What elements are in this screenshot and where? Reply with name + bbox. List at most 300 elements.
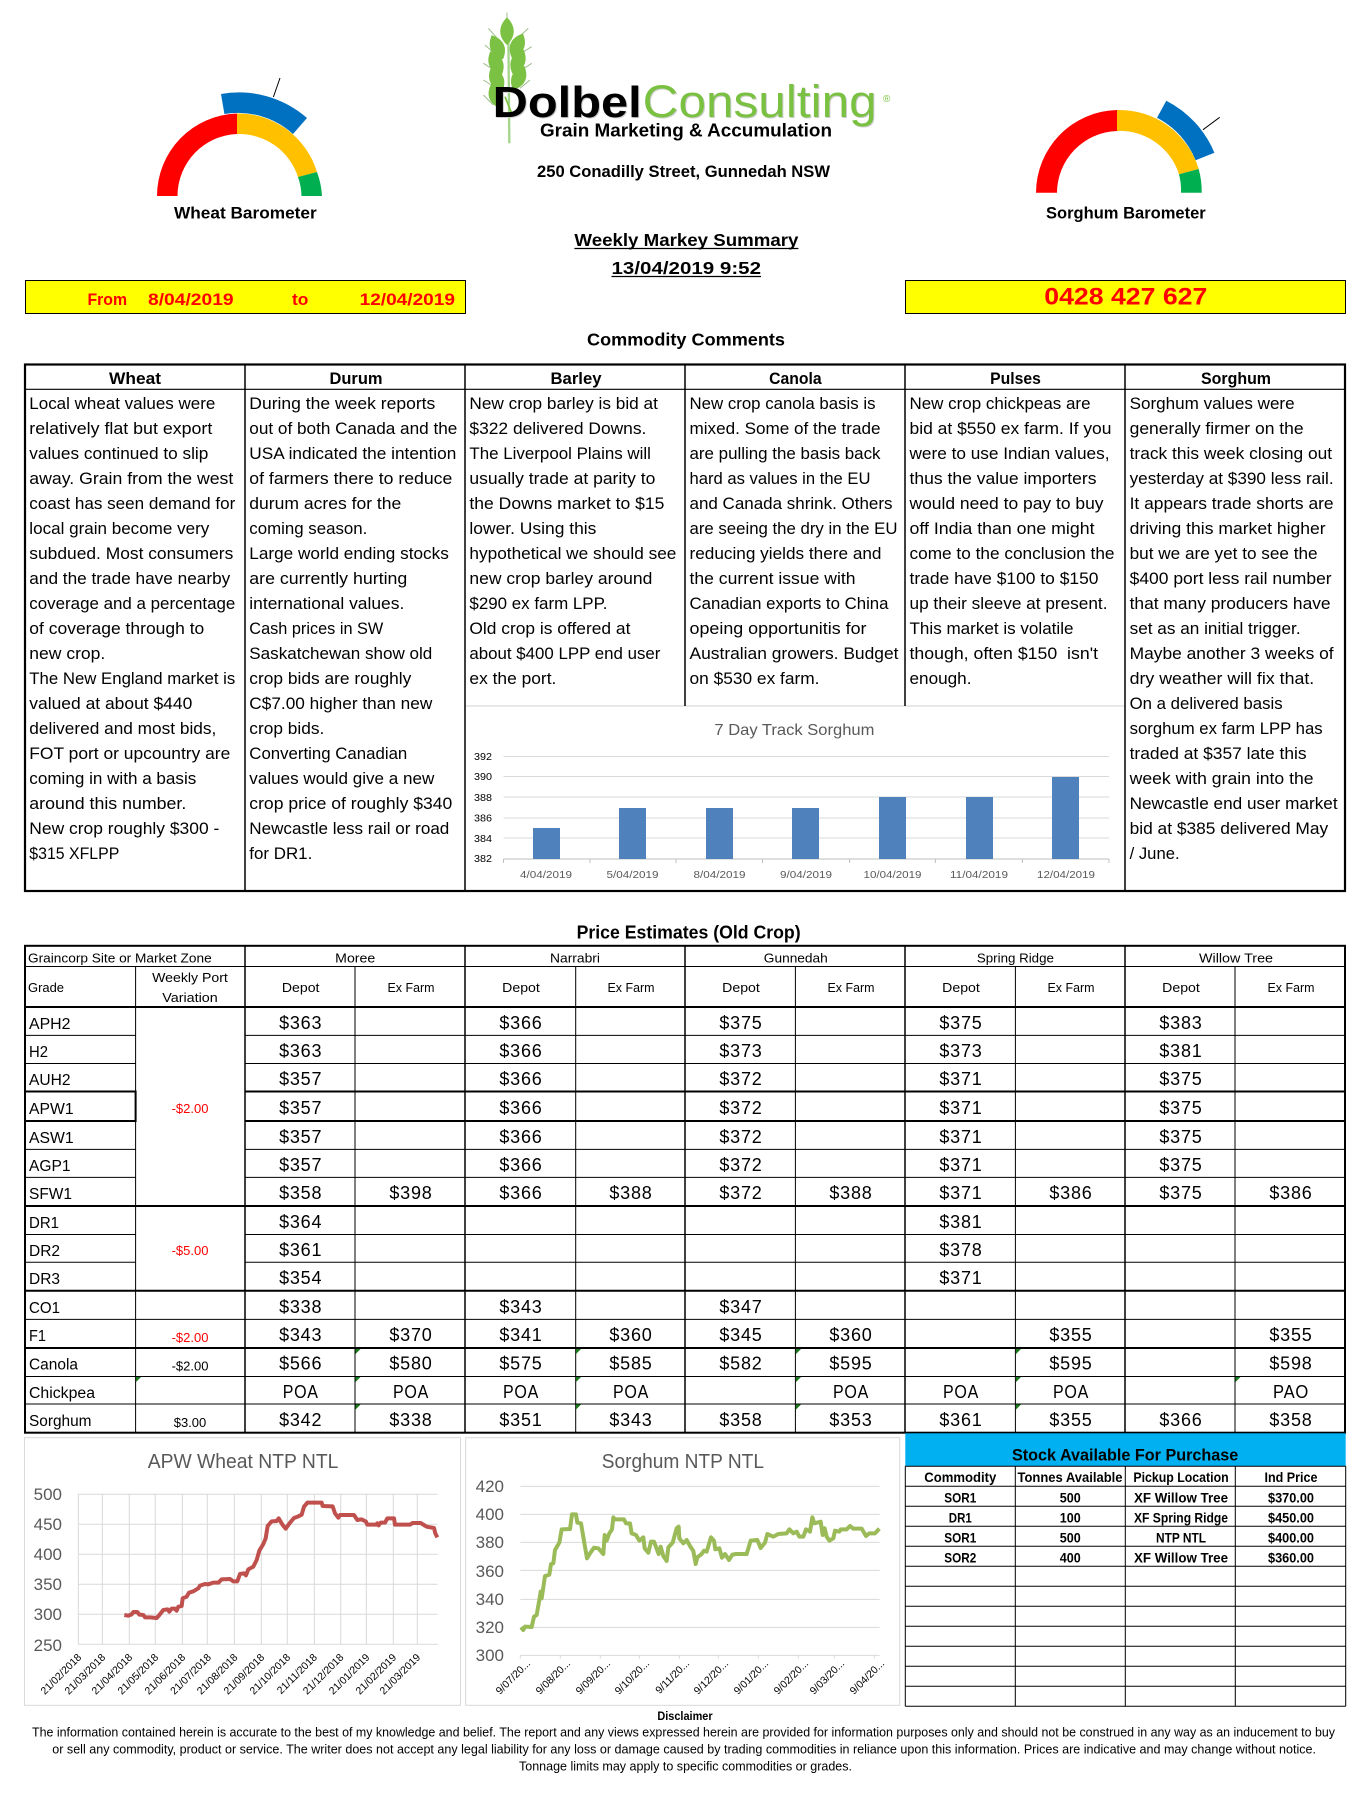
- chart: 7 day track sorghum: 392: [474, 751, 492, 763]
- stock row: SOR2 Willow Tree: $360.00: [1268, 1549, 1314, 1565]
- header: site row: Moree: [335, 950, 375, 965]
- wheat comment: around this number.: [29, 795, 186, 813]
- row: CO1: $343: [499, 1297, 543, 1317]
- chart: APW wheat NTP NTL: 500: [34, 1485, 62, 1504]
- wheat comment: coming in with a basis: [29, 770, 196, 788]
- stock table header row: [924, 1469, 1318, 1485]
- chart: APW wheat NTP NTL: 21/06/2018: [142, 1652, 188, 1697]
- pulses comment: up their sleeve at present.: [910, 595, 1108, 613]
- wheat comment: relatively flat but export: [29, 420, 213, 438]
- stock row: SOR1 NTP NTL: $400.00: [1268, 1529, 1314, 1545]
- stock table header row: Commodity: [924, 1469, 996, 1485]
- row: APH2: APH2: [29, 1016, 70, 1033]
- row: Chickpea: POA: [833, 1382, 869, 1402]
- chart: APW wheat NTP NTL: 21/07/2018: [168, 1652, 214, 1697]
- row: Chickpea: POA: [393, 1382, 429, 1402]
- row: CO1: [29, 1297, 763, 1317]
- pulses comment: come to the conclusion the: [910, 545, 1114, 563]
- wheat comment: [29, 395, 236, 863]
- sorghum comment: sorghum ex farm LPP has: [1130, 720, 1323, 738]
- stock row: DR1 Spring Ridge: [949, 1509, 1314, 1525]
- report title: Weekly Markey Summary: [574, 230, 799, 250]
- row: Sorghum: $3.00: [174, 1415, 206, 1430]
- chart: APW wheat NTP NTL: 21/11/2018: [275, 1652, 320, 1697]
- row: Chickpea: Chickpea: [29, 1385, 95, 1402]
- panel: price estimates table: [25, 946, 1345, 1433]
- sorghum comment: but we are yet to see the: [1130, 545, 1318, 563]
- pulses comment: New crop chickpeas are: [910, 395, 1090, 413]
- canola comment: reducing yields there and: [690, 545, 882, 563]
- row: H2: $363: [279, 1041, 322, 1061]
- chart: 7 day track sorghum: 11/04/2019: [950, 869, 1008, 881]
- chart: sorghum NTP NTL: 340: [476, 1590, 504, 1609]
- wheat comment: coverage and a percentage: [29, 595, 235, 613]
- barley comment: New crop barley is bid at: [469, 395, 658, 413]
- durum comment: During the week reports: [249, 395, 435, 413]
- chart: APW wheat NTP NTL: 21/04/2018: [89, 1652, 135, 1697]
- row: DR1: DR1: [29, 1215, 59, 1232]
- chart: APW wheat NTP NTL: 21/12/2018: [301, 1652, 347, 1697]
- pulses comment: off India than one might: [910, 520, 1095, 538]
- row: F1: $355: [1049, 1325, 1093, 1345]
- green comment markers: [136, 1349, 1240, 1410]
- sorghum comment: Sorghum values were: [1130, 395, 1295, 413]
- row: APW1: [29, 1098, 1203, 1118]
- row: DR3: DR3: [29, 1271, 60, 1288]
- wheat comment: New crop roughly $300 -: [29, 820, 219, 838]
- chart: APW wheat NTP NTL: 21/05/2018: [115, 1652, 161, 1697]
- chart: APW wheat NTP NTL: 21/03/2018: [62, 1652, 108, 1697]
- header: grade row: Ex Farm: [608, 980, 654, 995]
- row: H2: [29, 1041, 1203, 1061]
- phone number box: 0428 427 627: [1044, 283, 1207, 310]
- logo: Dolbel Consulting: Dolbel: [493, 78, 642, 127]
- row: ASW1: $372: [719, 1127, 763, 1147]
- canola comment: opeing opportunitis for: [690, 620, 867, 638]
- header: grade row: [28, 970, 1314, 1005]
- date range box: to: [292, 291, 308, 309]
- date range box: From: [88, 291, 127, 309]
- row: Canola: $580: [389, 1354, 433, 1374]
- row: H2: $381: [1159, 1041, 1203, 1061]
- column headers: [109, 370, 1271, 388]
- durum comment: of farmers there to reduce: [249, 470, 452, 488]
- stock table title: [905, 1433, 1346, 1466]
- chart: sorghum NTP NTL: 9/12/20...: [692, 1658, 731, 1697]
- wheat comment: $315 XFLPP: [29, 845, 119, 863]
- pulses comment: trade have $100 to $150: [910, 570, 1098, 588]
- row: AGP1: $366: [499, 1155, 543, 1175]
- chart: 7 day track sorghum: 10/04/2019: [864, 869, 922, 881]
- stock row: SOR1 NTP NTL: 500: [1060, 1529, 1081, 1545]
- row: Chickpea: [29, 1382, 1309, 1402]
- row: SFW1: $372: [719, 1183, 763, 1203]
- row: APW1: $357: [279, 1098, 322, 1118]
- row: Canola: $582: [719, 1354, 763, 1374]
- sorghum comment: / June.: [1130, 845, 1180, 863]
- chart: sorghum NTP NTL: 9/10/20...: [613, 1658, 652, 1697]
- wheat comment: away. Grain from the west: [29, 470, 234, 488]
- panel: stock available for purchase: [905, 1433, 1346, 1706]
- header: grade row: Grade: [28, 980, 64, 995]
- row: DR2: -$5.00: [172, 1243, 208, 1258]
- row: Sorghum: Sorghum: [29, 1413, 92, 1430]
- stock table header row: Ind Price: [1264, 1469, 1318, 1485]
- chart: 7 day track sorghum: [465, 706, 1125, 891]
- durum comment: Cash prices in SW: [249, 620, 384, 638]
- row: F1: $345: [719, 1325, 763, 1345]
- chart: sorghum NTP NTL: 380: [476, 1533, 504, 1552]
- panel: commodity comments table: [25, 364, 1345, 891]
- wheat comment: coast has seen demand for: [29, 495, 236, 513]
- row: SFW1: $366: [499, 1183, 543, 1203]
- row: H2: H2: [29, 1044, 48, 1061]
- chart: APW wheat NTP NTL: 21/08/2018: [195, 1652, 241, 1697]
- chart: sorghum NTP NTL: 9/11/20...: [653, 1658, 692, 1697]
- sorghum comment: $400 port less rail number: [1130, 570, 1332, 588]
- pulses comment: thus the value importers: [910, 470, 1096, 488]
- header: grade row: Depot: [282, 980, 320, 995]
- chart: 7 day track sorghum: 390: [474, 771, 492, 783]
- row: DR2: $361: [279, 1240, 322, 1260]
- chart: sorghum NTP NTL: 320: [476, 1618, 504, 1637]
- sorghum comment: It appears trade shorts are: [1130, 495, 1334, 513]
- row: SFW1: [29, 1183, 1313, 1203]
- canola comment: hard as values in the EU: [690, 470, 870, 488]
- row: F1: $343: [279, 1325, 322, 1345]
- row: F1: F1: [29, 1328, 46, 1345]
- canola comment: and Canada shrink. Others: [690, 495, 892, 513]
- durum comment: USA indicated the intention: [249, 445, 456, 463]
- row: APW1: $375: [1159, 1098, 1203, 1118]
- row: F1: [29, 1325, 1313, 1345]
- stock row: SOR1 Willow Tree: XF Willow Tree: [1134, 1489, 1228, 1505]
- logo: Dolbel Consulting: Grain Marketing & Accumulation: [540, 121, 832, 141]
- row: F1: $360: [829, 1325, 873, 1345]
- row: Chickpea: POA: [283, 1382, 319, 1402]
- sorghum comment: track this week closing out: [1130, 445, 1333, 463]
- wheat comment: subdued. Most consumers: [29, 545, 233, 563]
- durum comment: crop bids.: [249, 720, 324, 738]
- row: AUH2: AUH2: [29, 1072, 70, 1089]
- row: Canola: $595: [829, 1354, 873, 1374]
- row: Canola: $575: [499, 1354, 543, 1374]
- barley comment: The Liverpool Plains will: [469, 445, 651, 463]
- row: H2: $373: [719, 1041, 763, 1061]
- row: DR1: $364: [279, 1212, 322, 1232]
- sorghum comment: [1129, 395, 1338, 863]
- canola comment: the current issue with: [690, 570, 856, 588]
- row: AGP1: AGP1: [29, 1158, 70, 1175]
- row: Canola: $595: [1049, 1354, 1093, 1374]
- disclaimer: Tonnage limits may apply to specific commodities or grades.: [519, 1760, 852, 1774]
- row: AGP1: $357: [279, 1155, 322, 1175]
- header: site row: Spring Ridge: [977, 950, 1054, 965]
- sorghum comment: On a delivered basis: [1130, 695, 1283, 713]
- row: ASW1: $366: [499, 1127, 543, 1147]
- wheat comment: new crop.: [29, 645, 105, 663]
- row: APH2: $366: [499, 1013, 543, 1033]
- chart: 7 day track sorghum: 382: [474, 853, 492, 865]
- wheat comment: valued at about $440: [29, 695, 192, 713]
- row: SFW1: $375: [1159, 1183, 1203, 1203]
- wheat comment: of coverage through to: [29, 620, 204, 638]
- stock row: SOR2 Willow Tree: XF Willow Tree: [1134, 1549, 1228, 1565]
- row: CO1: $347: [719, 1297, 763, 1317]
- chart: APW wheat NTP NTL: 450: [34, 1515, 62, 1534]
- row: CO1: $338: [279, 1297, 322, 1317]
- chart: 7 day track sorghum: 7 Day Track Sorghum: [714, 722, 874, 739]
- column headers: Barley: [550, 370, 602, 388]
- disclaimer: [32, 1711, 1336, 1774]
- row: Sorghum: $366: [1159, 1410, 1203, 1430]
- barley comment: new crop barley around: [469, 570, 652, 588]
- row: DR2: DR2: [29, 1243, 60, 1260]
- wheat barometer label: Wheat Barometer: [174, 204, 317, 222]
- stock row: SOR1 Willow Tree: [944, 1489, 1314, 1505]
- barley comment: hypothetical we should see: [469, 545, 676, 563]
- date range box: [26, 280, 466, 314]
- row: AUH2: $371: [939, 1069, 983, 1089]
- stock row: DR1 Spring Ridge: DR1: [949, 1509, 972, 1525]
- price estimates heading: Price Estimates (Old Crop): [577, 923, 801, 943]
- chart: sorghum NTP NTL: [466, 1438, 900, 1705]
- row: APW1: APW1: [29, 1101, 74, 1118]
- phone number box: [906, 280, 1346, 314]
- column headers: Wheat: [109, 370, 162, 388]
- row: APW1: $372: [719, 1098, 763, 1118]
- stock table title: Stock Available For Purchase: [1012, 1446, 1238, 1465]
- chart: sorghum NTP NTL: 9/04/20...: [848, 1658, 887, 1697]
- chart: APW wheat NTP NTL: 21/01/2019: [327, 1652, 373, 1697]
- wheat comment: FOT port or upcountry are: [29, 745, 230, 763]
- durum comment: Large world ending stocks: [249, 545, 449, 563]
- row: Chickpea: POA: [943, 1382, 979, 1402]
- chart: sorghum NTP NTL: 9/07/20...: [494, 1658, 533, 1697]
- header: grade row: Ex Farm: [828, 980, 874, 995]
- durum comment: coming season.: [249, 520, 367, 538]
- canola comment: Australian growers. Budget: [690, 645, 899, 663]
- chart: sorghum NTP NTL: 9/08/20...: [534, 1658, 573, 1697]
- stock row: SOR1 Willow Tree: 500: [1060, 1489, 1081, 1505]
- row: Canola: [29, 1354, 1313, 1374]
- chart: APW wheat NTP NTL: 350: [34, 1575, 62, 1594]
- chart: sorghum NTP NTL: 360: [476, 1562, 504, 1581]
- sorghum comment: dry weather will fix that.: [1130, 670, 1314, 688]
- row: CO1: CO1: [29, 1300, 60, 1317]
- durum comment: [249, 395, 457, 863]
- barley comment: about $400 LPP end user: [469, 645, 661, 663]
- chart: APW wheat NTP NTL: 21/03/2019: [377, 1652, 423, 1697]
- canola comment: Canadian exports to China: [690, 595, 889, 613]
- row: Chickpea: POA: [1053, 1382, 1089, 1402]
- header: grade row: Ex Farm: [1268, 980, 1314, 995]
- row: SFW1: $386: [1269, 1183, 1313, 1203]
- chart: 7 day track sorghum: 8/04/2019: [694, 869, 746, 881]
- row: Sorghum: $353: [829, 1410, 873, 1430]
- row: H2: $366: [499, 1041, 543, 1061]
- durum comment: Newcastle less rail or road: [249, 820, 449, 838]
- wheat comment: The New England market is: [29, 670, 235, 688]
- row: F1: -$2.00: [172, 1330, 208, 1345]
- row: ASW1: ASW1: [29, 1130, 74, 1147]
- row: APH2: $383: [1159, 1013, 1203, 1033]
- logo: Dolbel Consulting: ®: [883, 94, 891, 105]
- wheat barometer gauge: [157, 78, 322, 196]
- row: Canola: Canola: [29, 1356, 78, 1374]
- row: AUH2: $375: [1159, 1069, 1203, 1089]
- logo: Dolbel Consulting: [483, 13, 891, 143]
- stock table header row: Tonnes Available: [1018, 1469, 1123, 1485]
- row: SFW1: $388: [829, 1183, 873, 1203]
- barley comment: $322 delivered Downs.: [469, 420, 646, 438]
- stock row: SOR1 NTP NTL: SOR1: [944, 1529, 976, 1545]
- logo: Dolbel Consulting: Consulting: [643, 76, 877, 127]
- row: DR1: [29, 1212, 983, 1232]
- row: Chickpea: POA: [503, 1382, 539, 1402]
- chart: 7 day track sorghum: 5/04/2019: [606, 869, 659, 881]
- canola comment: on $530 ex farm.: [690, 670, 820, 688]
- chart: APW wheat NTP NTL: [24, 1438, 460, 1705]
- chart: sorghum NTP NTL: 9/09/20...: [574, 1658, 613, 1697]
- row: F1: $360: [609, 1325, 653, 1345]
- sorghum comment: traded at $357 late this: [1130, 745, 1307, 763]
- stock row: SOR2 Willow Tree: [944, 1549, 1314, 1565]
- row: Chickpea: PAO: [1273, 1382, 1309, 1402]
- row: SFW1: $358: [279, 1183, 322, 1203]
- row: AGP1: $371: [939, 1155, 983, 1175]
- pulses comment: This market is volatile: [910, 620, 1074, 638]
- stock row: SOR1 NTP NTL: [944, 1529, 1314, 1545]
- chart: APW wheat NTP NTL: APW Wheat NTP NTL: [148, 1451, 338, 1473]
- row: F1: $355: [1269, 1325, 1313, 1345]
- row: DR3: [29, 1268, 983, 1288]
- stock row: DR1 Spring Ridge: XF Spring Ridge: [1134, 1509, 1228, 1525]
- barley comment: lower. Using this: [469, 520, 596, 538]
- header: grade row: Depot: [1162, 980, 1200, 995]
- pulses comment: were to use Indian values,: [908, 445, 1109, 463]
- commodity comments heading: Commodity Comments: [587, 330, 785, 350]
- header: grade row: Depot: [942, 980, 980, 995]
- row: AUH2: $357: [279, 1069, 322, 1089]
- row: AUH2: [29, 1069, 1203, 1089]
- durum comment: C$7.00 higher than new: [249, 695, 432, 713]
- row: APH2: [29, 1013, 1203, 1033]
- row: Sorghum: $338: [389, 1410, 433, 1430]
- stock row: SOR1 Willow Tree: SOR1: [944, 1489, 976, 1505]
- durum comment: are currently hurting: [249, 570, 407, 588]
- report title: 13/04/2019 9:52: [612, 258, 761, 278]
- row: DR2: $378: [939, 1240, 983, 1260]
- durum comment: Saskatchewan show old: [249, 645, 432, 663]
- chart: APW wheat NTP NTL: 250: [34, 1636, 62, 1655]
- wheat comment: delivered and most bids,: [29, 720, 216, 738]
- pulses comment: would need to pay to buy: [908, 495, 1104, 513]
- durum comment: values would give a new: [249, 770, 434, 788]
- row: Sorghum: $343: [609, 1410, 653, 1430]
- row: Canola: $585: [609, 1354, 653, 1374]
- sorghum comment: driving this market higher: [1130, 520, 1326, 538]
- chart: sorghum NTP NTL: 300: [476, 1646, 504, 1665]
- row: DR3: $371: [939, 1268, 983, 1288]
- column headers: Durum: [330, 370, 382, 388]
- pulses comment: [908, 395, 1114, 688]
- row: DR2: [29, 1240, 983, 1260]
- icon: wheat ear: [483, 13, 532, 143]
- wheat comment: and the trade have nearby: [29, 570, 231, 588]
- chart: 7 day track sorghum: 386: [474, 812, 492, 824]
- row: Sorghum: $342: [279, 1410, 322, 1430]
- canola comment: are seeing the dry in the EU: [690, 520, 898, 538]
- row: Canola: -$2.00: [172, 1358, 208, 1374]
- barley comment: Old crop is offered at: [469, 620, 631, 638]
- sorghum barometer label: Sorghum Barometer: [1046, 204, 1206, 222]
- header: grade row: Ex Farm: [388, 980, 434, 995]
- header: grade row: Weekly Port: [152, 970, 228, 985]
- stock row: SOR2 Willow Tree: SOR2: [944, 1549, 976, 1565]
- column headers: Canola: [769, 370, 822, 388]
- row: APH2: $363: [279, 1013, 322, 1033]
- header: site row: Gunnedah: [764, 950, 828, 965]
- chart: APW wheat NTP NTL: 21/02/2018: [38, 1652, 84, 1697]
- header: site row: Graincorp Site or Market Zone: [28, 950, 212, 965]
- canola comment: New crop canola basis is: [690, 395, 875, 413]
- chart: 7 day track sorghum: 12/04/2019: [1037, 869, 1095, 881]
- date range box: 12/04/2019: [360, 291, 455, 309]
- row: ASW1: $375: [1159, 1127, 1203, 1147]
- sorghum comment: yesterday at $390 less rail.: [1130, 470, 1334, 488]
- row: AGP1: [29, 1155, 1203, 1175]
- durum comment: crop price of roughly $340: [249, 795, 452, 813]
- row: SFW1: SFW1: [29, 1186, 72, 1203]
- row: Canola: $598: [1269, 1354, 1313, 1374]
- chart: sorghum NTP NTL: 9/03/20...: [808, 1658, 847, 1697]
- barley comment: the Downs market to $15: [469, 495, 664, 513]
- chart: sorghum NTP NTL: Sorghum NTP NTL: [602, 1451, 764, 1473]
- row: Sorghum: $358: [1269, 1410, 1313, 1430]
- sorghum comment: bid at $385 delivered May: [1130, 820, 1329, 838]
- chart: 7 day track sorghum: 4/04/2019: [520, 869, 572, 881]
- chart: 7 day track sorghum: 384: [474, 833, 492, 845]
- row: APW1: $371: [939, 1098, 983, 1118]
- row: SFW1: $386: [1049, 1183, 1093, 1203]
- row: AUH2: $372: [719, 1069, 763, 1089]
- row: F1: $341: [499, 1325, 543, 1345]
- row: ASW1: $371: [939, 1127, 983, 1147]
- row: SFW1: $398: [389, 1183, 433, 1203]
- stock row: DR1 Spring Ridge: 100: [1060, 1509, 1081, 1525]
- header: grade row: Variation: [162, 990, 218, 1005]
- chart: 7 day track sorghum: 9/04/2019: [780, 869, 832, 881]
- row: APW1: $366: [499, 1098, 543, 1118]
- row: SFW1: $388: [609, 1183, 653, 1203]
- durum comment: international values.: [249, 595, 404, 613]
- sorghum comment: week with grain into the: [1129, 770, 1314, 788]
- durum comment: Converting Canadian: [249, 745, 407, 763]
- header: grade row: Depot: [722, 980, 760, 995]
- row: ASW1: $357: [279, 1127, 322, 1147]
- barley comment: [469, 395, 676, 688]
- durum comment: for DR1.: [249, 845, 312, 863]
- row: AGP1: $372: [719, 1155, 763, 1175]
- pulses comment: enough.: [910, 670, 972, 688]
- wheat comment: local grain become very: [29, 520, 210, 538]
- row: DR3: $354: [279, 1268, 322, 1288]
- row: APH2: $375: [719, 1013, 763, 1033]
- header: grade row: Depot: [502, 980, 540, 995]
- disclaimer: The information contained herein is accurate to the best of my knowledge and belief. The report and any views expressed herein are provided for information purposes only and should not be construed in any way as an inducement to buy: [32, 1726, 1336, 1740]
- row: ASW1: [29, 1127, 1203, 1147]
